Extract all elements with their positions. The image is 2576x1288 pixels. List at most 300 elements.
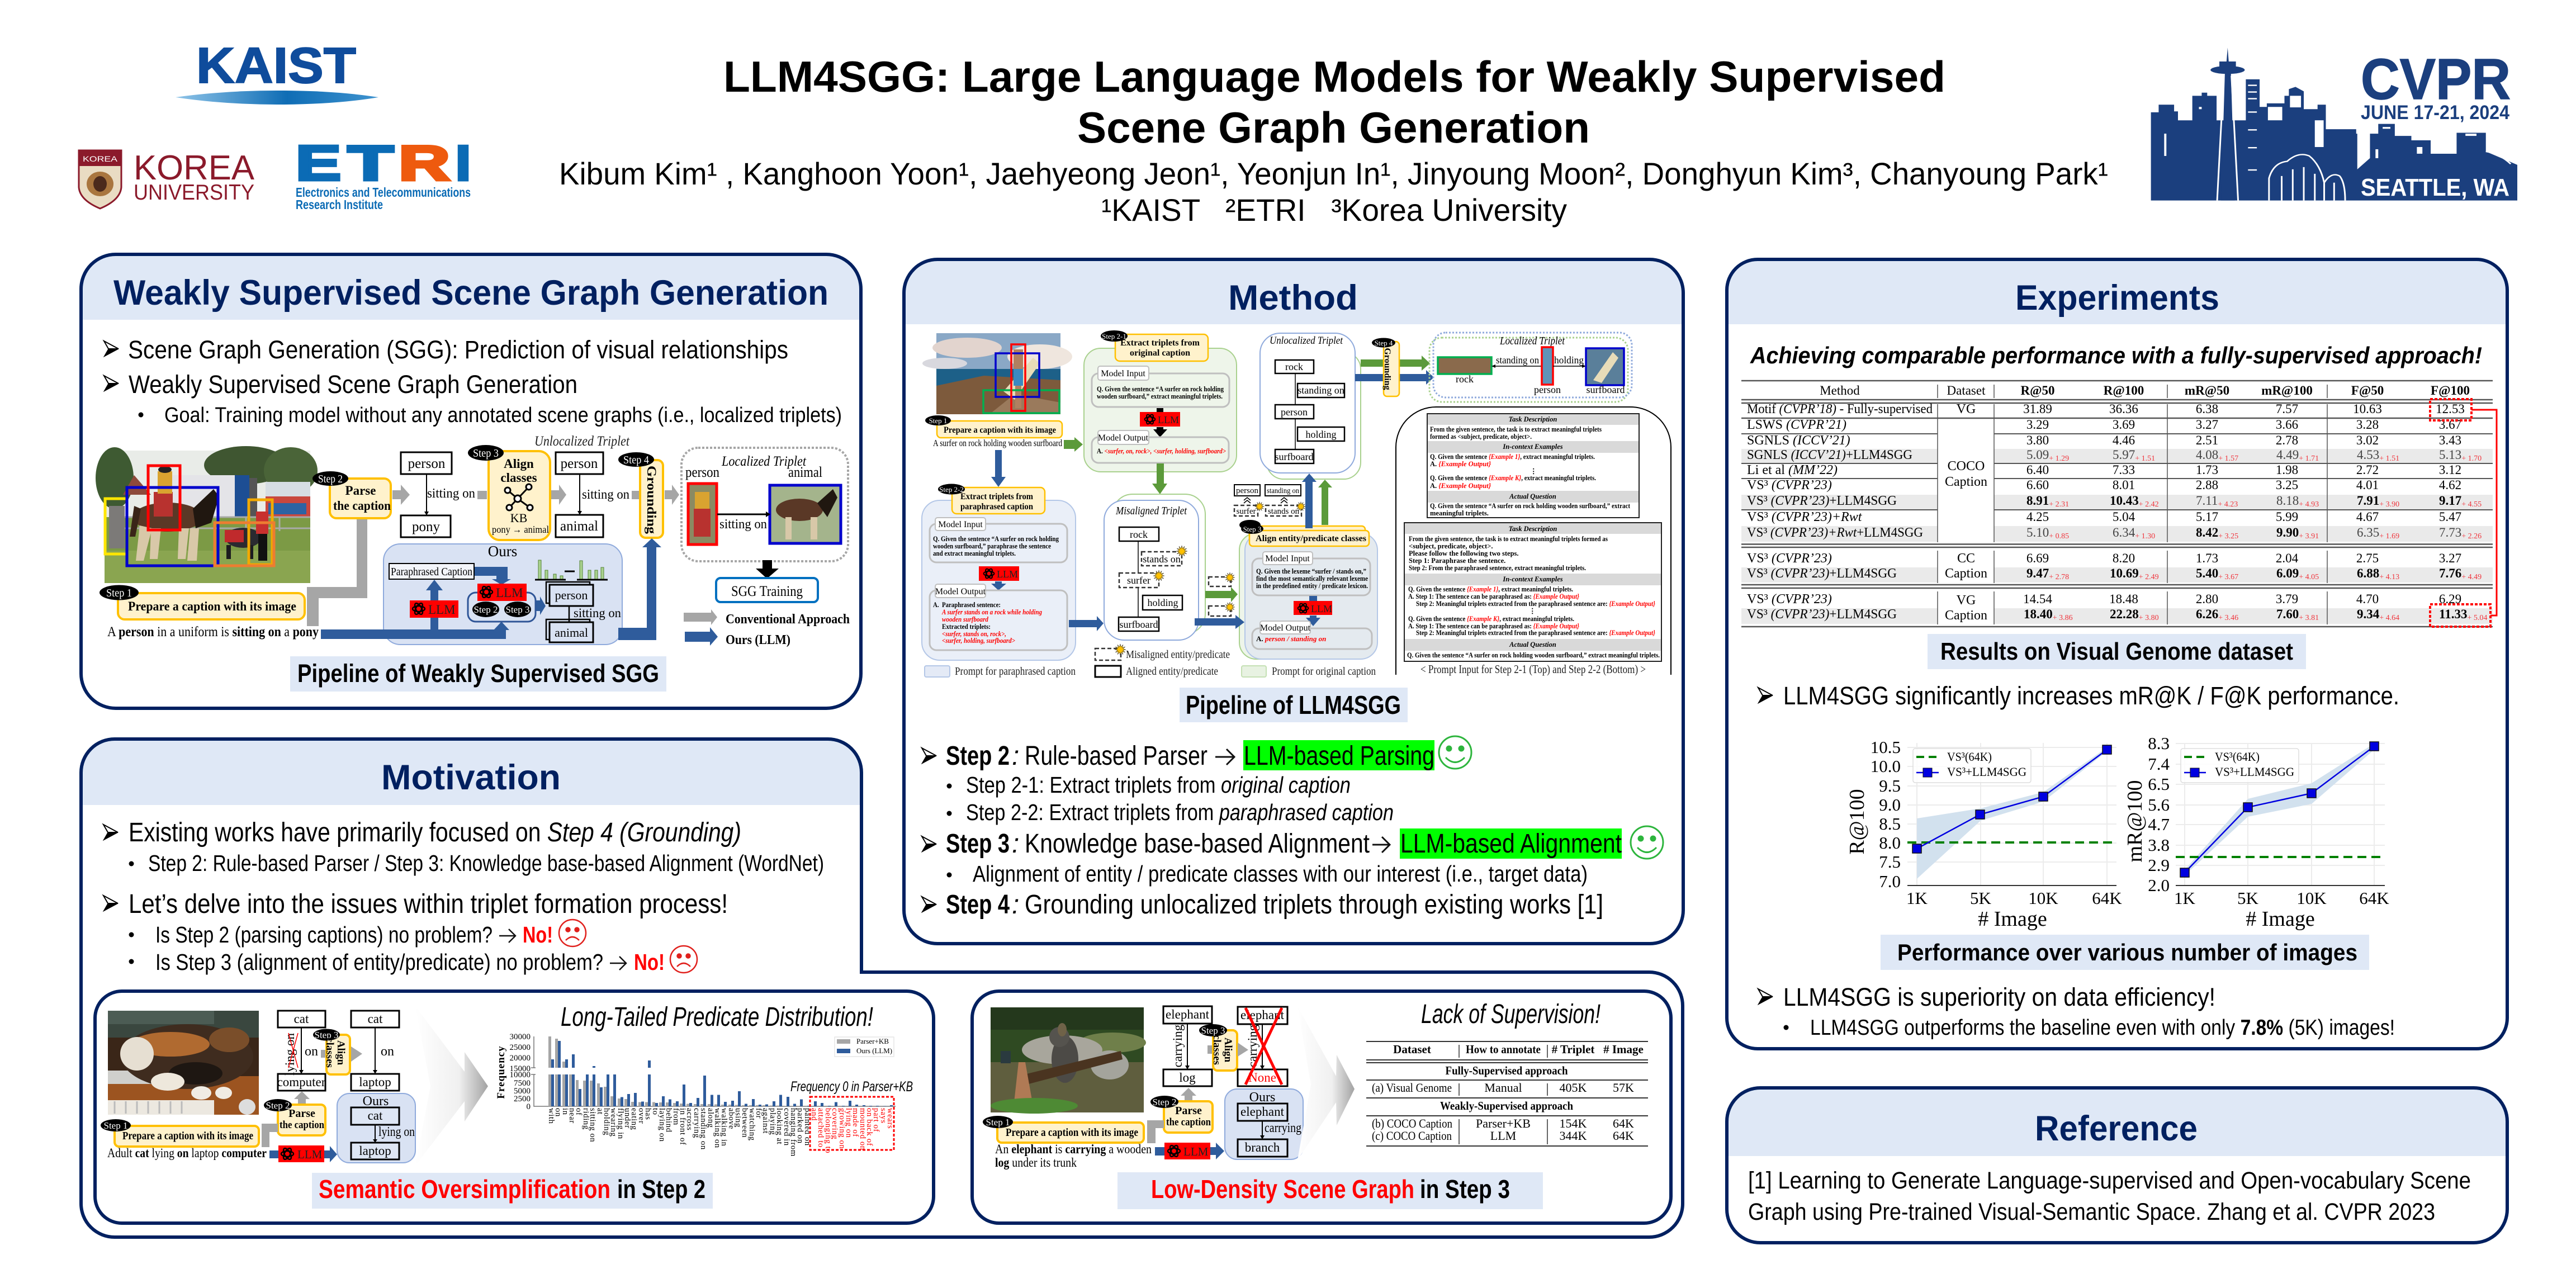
- prompt panel: step 2-2 paraphrased caption: <surfer, holding, surfboard>: [942, 636, 1015, 645]
- triplet: person sitting on animal: animal: [560, 519, 598, 534]
- table method column: VS³ (CVPR’23)+LLM4SGG: [1747, 494, 1897, 508]
- triplet: person sitting on animal: [556, 452, 629, 537]
- x axis labels: made of: [851, 1108, 860, 1137]
- table values LLM4SGG rows: + 1.29: [2049, 454, 2069, 463]
- table values LLM4SGG rows: 5.13: [2439, 448, 2461, 462]
- x axis labels: lying on: [844, 1108, 853, 1138]
- step 2: parse the caption: Step 2: [318, 473, 343, 485]
- annotation: Frequency 0 in Parser+KB: [790, 1079, 913, 1095]
- step 3: align classes: classes: [500, 471, 537, 485]
- align classes step 3: Align: [335, 1040, 347, 1066]
- align panel: step 3: A. person / standing on: [1256, 634, 1326, 643]
- prompt panel: step 2-1 original caption: Model Input: [1101, 369, 1145, 378]
- line chart: mR@100: # Image: [2246, 907, 2315, 931]
- arrow blue: [1195, 615, 1244, 629]
- table dataset column: Caption: [1945, 608, 1987, 623]
- table values LLM4SGG rows: 22.28: [2110, 607, 2139, 621]
- line chart: mR@100: mR@100: [2123, 780, 2147, 862]
- table: dataset statistics: # Triplet: [1552, 1043, 1594, 1056]
- table values LLM4SGG rows: + 1.51: [2379, 454, 2399, 463]
- triplet: cat on laptop: cat: [368, 1012, 383, 1026]
- logo: ETRI: E: [296, 135, 341, 191]
- unlocalized triplet panel: surfboard: [1275, 451, 1313, 462]
- table: step 2-2 prompt: Q. Given the sentence “A surfer on rock holding wooden surfboard,” extract meaningful triplets.: [1407, 651, 1660, 659]
- highlight: zero frequency: [810, 1097, 894, 1150]
- table values LLM4SGG rows: [2024, 448, 2487, 622]
- x axis labels: growing on: [837, 1108, 846, 1149]
- logo: CVPR 2024 Seattle: SEATTLE, WA: [2361, 174, 2509, 201]
- logo: Korea University: KOREA: [134, 149, 255, 187]
- table: step 2-2 prompt: ⋮: [1529, 607, 1536, 615]
- affiliations: ¹KAIST ²ETRI ³Korea University: [1101, 192, 1567, 228]
- localized triplet panel: person: [1534, 384, 1561, 395]
- sub bullet: step 2 problem: Is Step 2 (parsing captions) no problem?: [155, 922, 493, 948]
- align classes step 3: classes: [324, 1038, 335, 1068]
- table header: Dataset: [1947, 383, 1986, 397]
- parse caption step 2: Parse: [288, 1107, 315, 1120]
- legend: Parser+KB: [856, 1037, 889, 1045]
- bar chart: predicate distribution: 10000: [510, 1071, 531, 1079]
- x axis labels: parked on: [795, 1108, 804, 1144]
- align classes step 3: classes: [1211, 1035, 1223, 1065]
- SGG training box: SGG Training: [731, 583, 803, 599]
- sub bullet: step 3 problem: Is Step 3 (alignment of entity/predicate) no problem?: [155, 949, 603, 975]
- localized triplet box: [681, 448, 848, 561]
- legend: [835, 1037, 894, 1057]
- x axis labels: belonging to: [823, 1108, 832, 1153]
- table values plain rows: 2.75: [2356, 551, 2379, 565]
- line chart: mR@100: 3.8: [2148, 835, 2170, 855]
- arrow green: [1064, 437, 1083, 452]
- table values LLM4SGG rows: + 2.49: [2139, 573, 2159, 581]
- table values LLM4SGG rows: + 2.31: [2049, 500, 2069, 509]
- legend: [925, 644, 1376, 678]
- x axis labels: for: [754, 1108, 763, 1119]
- arrow: [551, 485, 566, 505]
- table values LLM4SGG rows: + 2.42: [2139, 500, 2159, 509]
- table values LLM4SGG rows: 6.35: [2357, 525, 2379, 539]
- table: dataset statistics: LLM: [1490, 1129, 1516, 1143]
- bar chart: predicate distribution: 5000: [514, 1087, 531, 1096]
- heading: Motivation: [381, 758, 561, 797]
- table: step 2-2 prompt: Q. Given the sentence {Example K}, extract meaningful triplets.: [1408, 615, 1574, 623]
- table: step 2-2 prompt: Actual Question: [1509, 641, 1556, 648]
- table: dataset statistics: 64K: [1613, 1129, 1634, 1143]
- bullet: mR@K increase: LLM4SGG significantly increases mR@K / F@K performance.: [1783, 681, 2399, 710]
- table: step 2-1 prompt: meaningful triplets.: [1430, 509, 1489, 517]
- LLM flow: LLM: [1183, 1145, 1209, 1158]
- prompt panel: step 2-2 paraphrased caption: Q. Given the sentence “A surfer on rock holding: [933, 534, 1059, 543]
- table: dataset statistics: [1366, 1041, 1648, 1146]
- table: dataset statistics: 57K: [1613, 1081, 1634, 1095]
- table values LLM4SGG rows: + 2.26: [2461, 532, 2482, 541]
- bar chart: predicate distribution: 25000: [510, 1043, 531, 1052]
- table values LLM4SGG rows: + 1.51: [2135, 454, 2155, 463]
- step 1: Prepare a caption with its image: [944, 425, 1056, 435]
- caption: performance: [1881, 935, 2369, 970]
- parse caption step 2: the caption: [1166, 1116, 1211, 1128]
- table values plain rows: 36.36: [2109, 402, 2138, 416]
- table: dataset statistics: Manual: [1484, 1081, 1522, 1095]
- table values LLM4SGG rows: 6.09: [2276, 566, 2299, 580]
- table: step 2-1 prompt: A. {Example Output}: [1430, 460, 1491, 468]
- table values LLM4SGG rows: 4.49: [2276, 448, 2299, 462]
- line chart: R@100: VS³(64K): [1947, 750, 1992, 764]
- table values LLM4SGG rows: + 3.46: [2218, 614, 2238, 622]
- table dataset column: [1945, 402, 1987, 623]
- x axis labels: riding: [581, 1108, 590, 1130]
- image: horse photo with bounding boxes: [96, 446, 318, 583]
- table method column: [1747, 402, 1933, 622]
- caption: results: [1928, 634, 2306, 669]
- arrow: grey path to parser: [307, 518, 367, 626]
- step 3: align classes: pony → animal: [492, 524, 549, 535]
- step 4: grounding: [618, 452, 663, 538]
- ours panel: Ours: [1249, 1090, 1275, 1105]
- heading: Method: [1228, 278, 1358, 318]
- arrow connector: [1147, 1120, 1164, 1143]
- misaligned triplet panel: holding: [1147, 597, 1178, 608]
- step 3: align classes: KB: [510, 511, 527, 525]
- caption: low density scene graph: [1117, 1172, 1543, 1209]
- panel: Reference: [1727, 1088, 2507, 1243]
- table: step 2-2 prompt: Please follow the following two steps.: [1409, 550, 1519, 557]
- triplet: cat on computer: [277, 1011, 326, 1091]
- table values plain rows: 5.99: [2276, 510, 2298, 524]
- prepare caption step 1: [983, 1116, 1144, 1143]
- SGG training box: [716, 578, 818, 602]
- align panel: step 3: Step 3: [1243, 525, 1261, 533]
- Ours LLM flow panel: LLM: [428, 603, 456, 617]
- x axis labels: behind: [664, 1108, 673, 1133]
- unlocalized triplet panel: Unlocalized Triplet: [1270, 335, 1343, 347]
- LLM flow: [1155, 1143, 1224, 1159]
- parse caption step 2: [264, 1099, 325, 1135]
- ours panel: branch: [1245, 1140, 1280, 1154]
- step 2: parse the caption: [312, 471, 391, 518]
- misaligned triplet panel: surfer: [1127, 575, 1150, 586]
- align classes step 3: Step 3: [315, 1030, 338, 1040]
- bar chart: predicate distribution: Frequency: [495, 1045, 507, 1099]
- table values LLM4SGG rows: + 3.81: [2299, 614, 2319, 622]
- step 3: align classes: Align: [504, 457, 534, 471]
- ours panel: [1225, 1089, 1303, 1159]
- x axis labels: attached to: [816, 1108, 825, 1148]
- line chart: R@100: 10.0: [1871, 756, 1901, 776]
- table values LLM4SGG rows: + 4.05: [2299, 573, 2319, 581]
- table: step 2-1 prompt: A. {Example Output}: [1430, 482, 1491, 490]
- caption: performance: Performance over various number of images: [1897, 939, 2357, 965]
- triplet: cat on laptop: [351, 1011, 399, 1091]
- table values plain rows: 7.33: [2113, 463, 2135, 477]
- x axis labels: near: [567, 1108, 576, 1124]
- table values plain rows: 3.67: [2439, 418, 2461, 432]
- arrow up: [1181, 1088, 1196, 1101]
- caption: results: Results on Visual Genome dataset: [1940, 638, 2293, 665]
- step 3: align classes: Step 3: [473, 447, 499, 460]
- table: dataset statistics: (c) COCO Caption: [1372, 1129, 1452, 1143]
- misaligned triplet panel: surfboard: [1120, 619, 1158, 630]
- prepare caption step 1: [101, 1119, 259, 1147]
- legend: Ours (LLM): [856, 1046, 892, 1055]
- sub bullet: step 2-1: Step 2-1: Extract triplets from original caption: [966, 772, 1351, 798]
- reference text: [1] Learning to Generate Language-supervised and Open-vocabulary Scene: [1748, 1167, 2471, 1194]
- misaligned triplet panel: [1104, 494, 1205, 640]
- line chart: mR@100: 5.6: [2148, 795, 2170, 815]
- table values plain rows: 3.02: [2356, 433, 2379, 447]
- triplet: elephant none crossed out: [1238, 1007, 1287, 1086]
- table values LLM4SGG rows: + 3.67: [2218, 573, 2238, 581]
- heading: Reference: [2035, 1109, 2198, 1148]
- localized triplet panel: holding: [1554, 354, 1584, 366]
- step 4: grounding: Grounding: [645, 466, 659, 534]
- step 1: prepare caption: Prepare a caption with its image: [128, 599, 296, 613]
- legend: conventional approach: Conventional Approach: [726, 612, 850, 627]
- x axis labels: covering: [830, 1108, 839, 1139]
- table: step 2-2 prompt: Q. Given the sentence {Example 1}, extract meaningful triplets.: [1408, 585, 1573, 593]
- table values LLM4SGG rows: 8.42: [2196, 525, 2218, 539]
- table: step 2-2 prompt: From the given sentence, the task is to extract meaningful triplets formed as: [1409, 535, 1608, 543]
- table values LLM4SGG rows: + 3.80: [2139, 614, 2159, 622]
- arrow: [665, 485, 679, 505]
- bullet: step 2: Rule-based Parser: [1025, 741, 1208, 771]
- bullet: step 4: Step 4: [946, 890, 1010, 920]
- table values LLM4SGG rows: 7.76: [2439, 566, 2461, 580]
- line chart: R@100: # Image: [1978, 907, 2047, 931]
- localized triplet box: animal: [788, 464, 822, 480]
- arrows to localized triplet: [1355, 356, 1434, 385]
- prompt panel: step 2-2 paraphrased caption: and extract meaningful triplets.: [933, 549, 1016, 557]
- table header: F@100: [2431, 383, 2470, 398]
- table: dataset statistics: 64K: [1613, 1116, 1634, 1130]
- legend: ours: Ours (LLM): [726, 633, 790, 647]
- table values LLM4SGG rows: 9.17: [2439, 494, 2461, 508]
- caption: pipeline of WSSGG: Pipeline of Weakly Supervised SGG: [297, 659, 659, 688]
- bar chart: predicate distribution: 20000: [510, 1054, 531, 1063]
- step 1: prepare caption: [100, 585, 305, 619]
- sub bullet: step 2-2: Step 2-2: Extract triplets from paraphrased caption: [966, 799, 1394, 825]
- triplet: cat on computer: on: [305, 1044, 318, 1059]
- table values plain rows: 3.12: [2439, 463, 2461, 477]
- line chart: mR@100: 8.3: [2148, 733, 2170, 753]
- table values LLM4SGG rows: 9.90: [2276, 525, 2299, 539]
- legend: conventional approach: [684, 609, 850, 627]
- line chart: mR@100: VS³(64K): [2215, 750, 2260, 764]
- table values LLM4SGG rows: 7.91: [2357, 494, 2379, 508]
- line chart: mR@100: 2.0: [2148, 875, 2170, 895]
- subheading: Achieving comparable performance with a fully-supervised approach!: [1750, 342, 2482, 368]
- x axis labels: mounted on: [858, 1108, 867, 1150]
- logo: Korea University: [79, 149, 255, 209]
- table values plain rows: 3.25: [2276, 478, 2298, 492]
- prompt panel: step 2-2 paraphrased caption: Extract triplets from: [960, 492, 1034, 501]
- legend: Prompt for paraphrased caption: [955, 665, 1076, 678]
- legend: ours: [685, 627, 790, 647]
- table values LLM4SGG rows: + 1.70: [2461, 454, 2482, 463]
- line chart: mR@100: 7.4: [2148, 754, 2170, 774]
- table values LLM4SGG rows: 5.09: [2026, 448, 2049, 462]
- x axis labels: of: [574, 1108, 583, 1115]
- table dataset column: VG: [1957, 402, 1976, 416]
- sub panel: semantic oversimplification: [95, 991, 934, 1223]
- x axis labels: against: [761, 1108, 770, 1134]
- x axis labels: walking on: [713, 1108, 722, 1148]
- bullet: data efficiency: LLM4SGG is superiority on data efficiency!: [1783, 983, 2215, 1011]
- unlocalized triplet panel: rock: [1285, 361, 1303, 372]
- table values plain rows: 4.46: [2113, 433, 2135, 447]
- localized triplet panel: standing on: [1496, 354, 1539, 366]
- table: dataset statistics: Dataset: [1393, 1043, 1431, 1056]
- table values plain rows: 2.88: [2196, 478, 2218, 492]
- table: step 2-1 prompt: Q. Given the sentence “A surfer on rock holding wooden surfboard,” extract: [1430, 502, 1631, 510]
- table method column: SGNLS (ICCV’21): [1747, 433, 1850, 448]
- table: step 2-2 prompt: Step 2: Meaningful triplets extracted from the paraphrased sentence are: {Example Output}: [1416, 629, 1656, 637]
- table: step 2-1 prompt: ⋮: [1530, 467, 1537, 475]
- icon: frown: [670, 946, 697, 973]
- x axis labels: walking in: [719, 1108, 728, 1147]
- parse caption step 2: Parse: [1175, 1105, 1202, 1117]
- x axis labels: holding: [602, 1108, 611, 1135]
- bullet: step 2: :: [1012, 741, 1019, 771]
- align classes step 3: Step 3: [1201, 1025, 1225, 1036]
- table title: Lack of Supervision!: [1421, 1000, 1600, 1029]
- ours panel: carrying: [1265, 1121, 1301, 1135]
- step 4: grounding: Step 4: [623, 454, 649, 466]
- bar chart: predicate distribution: [495, 1033, 913, 1157]
- prompt panel: step 2-2 paraphrased caption: Model Output: [935, 587, 986, 596]
- logo: ETRI: Electronics and Telecommunications: [296, 185, 471, 200]
- table values LLM4SGG rows: + 4.23: [2218, 500, 2238, 509]
- table dataset column: CC: [1957, 551, 1975, 566]
- table values LLM4SGG rows: + 4.93: [2299, 500, 2319, 509]
- table values LLM4SGG rows: + 4.49: [2461, 573, 2482, 581]
- unlocalized triplet label: Unlocalized Triplet: [534, 434, 630, 449]
- title: [723, 52, 1945, 152]
- table values LLM4SGG rows: + 3.90: [2379, 500, 2399, 509]
- align panel: step 3: in the predefined entity / predicate lexicon.: [1256, 581, 1368, 590]
- aligned mapping mini boxes: person: [1236, 486, 1258, 495]
- align classes step 3: [1199, 1024, 1248, 1071]
- table values LLM4SGG rows: + 3.91: [2299, 532, 2319, 541]
- caption: semantic oversimplification: in Step 2: [617, 1175, 705, 1204]
- x axis labels: watching: [747, 1108, 756, 1141]
- prompt input tables: [1396, 407, 1671, 676]
- table: dataset statistics: Fully-Supervised approach: [1446, 1064, 1568, 1077]
- prompt panel: step 2-1 original caption: A. <surfer, on, rock>, <surfer, holding, surfboard>: [1097, 447, 1226, 455]
- triplet: person sitting on animal: sitting on: [582, 487, 629, 502]
- line chart: R@100: VS³+LLM4SGG: [1947, 765, 2026, 779]
- bullet: WSSGG: Weakly Supervised Scene Graph Generation: [129, 370, 577, 399]
- localized triplet box: person: [685, 464, 719, 480]
- table values plain rows: 2.72: [2356, 463, 2379, 477]
- table values LLM4SGG rows: + 1.71: [2299, 454, 2319, 463]
- table values plain rows: [2023, 402, 2465, 606]
- aligned mapping mini boxes: [1234, 485, 1306, 516]
- x axis labels: part of: [872, 1108, 880, 1132]
- arrows up: [1302, 473, 1332, 528]
- table values plain rows: 6.69: [2026, 551, 2049, 565]
- table values plain rows: 3.29: [2026, 418, 2049, 432]
- localized triplet panel: rock: [1456, 373, 1474, 385]
- Ours LLM flow panel: Paraphrased Caption: [391, 566, 472, 578]
- unlocalized triplet panel: standing on: [1298, 385, 1344, 396]
- aligned mapping mini boxes: stands on: [1268, 507, 1300, 516]
- x axis labels: across: [685, 1108, 694, 1130]
- table values plain rows: 8.20: [2113, 551, 2135, 565]
- x axis labels: has: [643, 1108, 652, 1120]
- x axis labels: from: [671, 1108, 680, 1125]
- table values plain rows: 7.57: [2276, 402, 2298, 416]
- line chart: R@100: 1K: [1906, 888, 1928, 908]
- icon: frown: [559, 920, 586, 946]
- bar chart: predicate distribution: 0: [527, 1102, 531, 1111]
- title: LLM4SGG: Large Language Models for Weakly Supervised: [723, 52, 1945, 101]
- table values LLM4SGG rows: + 0.85: [2049, 532, 2069, 541]
- table: step 2-2 prompt: A. Step 1: The sentence can be paraphrased as: {Example Output}: [1408, 622, 1580, 630]
- x axis labels: sitting on: [588, 1108, 597, 1142]
- bar chart: predicate distribution: 7500: [514, 1079, 531, 1088]
- x axis labels: with: [547, 1108, 556, 1124]
- arrow stub: [632, 491, 640, 499]
- caption: semantic oversimplification: Semantic Oversimplification: [319, 1175, 610, 1204]
- table: dataset statistics: (b) COCO Caption: [1372, 1116, 1452, 1130]
- parse caption step 2: Step 2: [1153, 1097, 1176, 1107]
- table values LLM4SGG rows: 4.08: [2196, 448, 2218, 462]
- table values LLM4SGG rows: + 1.57: [2218, 454, 2238, 463]
- step 4 grounding: Grounding: [1382, 348, 1392, 390]
- prepare caption step 1: Prepare a caption with its image: [1006, 1126, 1138, 1139]
- step 1: prepare caption: Step 1: [106, 587, 132, 599]
- x axis labels: and: [809, 1108, 818, 1121]
- table method column: VS³ (CVPR’23): [1747, 592, 1832, 607]
- prompt table caption: < Prompt Input for Step 2-1 (Top) and Step 2-2 (Bottom) >: [1420, 662, 1646, 676]
- bullet: delve: Let’s delve into the issues within triplet formation process!: [129, 889, 728, 919]
- line chart: mR@100: 10K: [2296, 888, 2327, 908]
- prompt panel: step 2-2 paraphrased caption: A surfer stands on a rock while holding: [941, 608, 1042, 616]
- bullet: step 2: Step 2: [946, 741, 1010, 771]
- bullet: step 4: Grounding unlocalized triplets through existing works [1]: [1025, 890, 1603, 920]
- logo: Korea University: KOREA: [83, 154, 118, 163]
- panel: Method: [904, 259, 1683, 944]
- table values LLM4SGG rows: + 3.25: [2218, 532, 2238, 541]
- table: results on visual genome: [1741, 381, 2497, 627]
- table: dataset statistics: Weakly-Supervised approach: [1440, 1099, 1573, 1112]
- triplet: person sitting on animal: person: [561, 456, 598, 471]
- table values LLM4SGG rows: + 5.04: [2467, 614, 2487, 622]
- Ours LLM flow panel: sitting on: [574, 606, 621, 620]
- logo: ETRI: T: [348, 135, 394, 191]
- localized triplet box: sitting on: [719, 517, 767, 532]
- grey series: [548, 1036, 800, 1106]
- table header: R@100: [2104, 383, 2144, 398]
- line chart: mR@100: 5K: [2237, 888, 2259, 908]
- triplet: cat on computer: computer: [277, 1075, 326, 1089]
- sub bullet: rule based: Step 2: Rule-based Parser / Step 3: Knowledge base-based Alignment (WordNet): [148, 850, 824, 876]
- align panel: step 3: Model Input: [1265, 554, 1310, 564]
- x axis labels: covered in: [782, 1108, 791, 1146]
- table values plain rows: 3.28: [2356, 418, 2379, 432]
- table: step 2-2 prompt: [1404, 523, 1661, 661]
- table values plain rows: 3.27: [2196, 418, 2218, 432]
- caption text: A person in a uniform is sitting on a pony: [107, 624, 319, 640]
- table values LLM4SGG rows: 4.53: [2357, 448, 2379, 462]
- heading: Experiments: [2015, 278, 2219, 318]
- line chart: R@100: [1845, 737, 2122, 931]
- table values plain rows: 6.38: [2196, 402, 2218, 416]
- table values LLM4SGG rows: 8.18: [2276, 494, 2299, 508]
- caption: low density scene graph: in Step 3: [1420, 1175, 1510, 1204]
- table: step 2-1 prompt: [1427, 414, 1639, 518]
